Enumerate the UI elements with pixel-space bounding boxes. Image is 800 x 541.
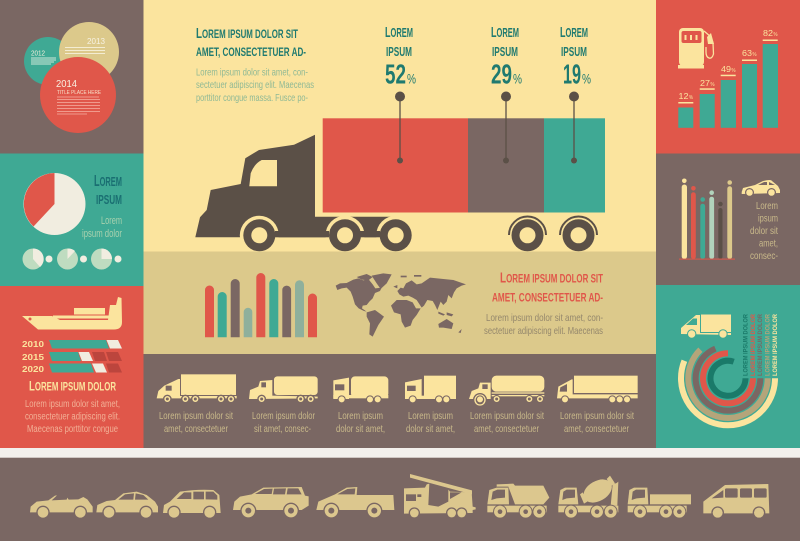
text: car caption: dolor sit — [750, 225, 778, 237]
captions: sit amet, consec- — [254, 423, 311, 435]
text: world body: Lorem ipsum dolor sit amet, con- — [486, 312, 603, 324]
text: main body: Lorem ipsum dolor sit amet, con- — [196, 66, 308, 78]
mini pies — [22, 248, 122, 270]
icon: van — [703, 484, 769, 519]
icon: cement mixer — [558, 475, 618, 519]
panel: car chart — [656, 154, 800, 285]
pins — [395, 92, 579, 164]
icon: box truck 1 — [157, 374, 237, 403]
stat: 52%: 52 — [385, 58, 406, 90]
bar chart: fuel: % — [774, 32, 778, 38]
panel: vehicle strip — [0, 458, 800, 541]
captions: amet, consectetuer — [164, 423, 228, 435]
stat: 52%: LOREM — [385, 24, 413, 41]
icon: ship — [22, 297, 122, 330]
captions: amet, consectetuer — [474, 423, 539, 435]
panel: truck types — [144, 354, 656, 448]
stat: 29% — [491, 24, 522, 90]
bar chart: fuel: % — [710, 82, 715, 88]
icon: minivan — [163, 490, 221, 519]
captions — [159, 410, 634, 435]
circle: 2014: 2014 — [56, 79, 77, 90]
panel: world — [144, 252, 656, 354]
bar chart: fuel: 27 — [700, 78, 710, 88]
text: world body — [484, 312, 603, 337]
text: car caption: Lorem — [756, 200, 778, 212]
icon: flatbed — [628, 488, 691, 519]
stat: 52% — [385, 24, 416, 90]
panel: fuel chart — [656, 0, 800, 154]
captions: amet, consectetuer — [564, 423, 629, 435]
icon: crane truck — [404, 474, 476, 519]
captions: Lorem ipsum dolor — [252, 410, 315, 422]
bar chart — [205, 273, 317, 337]
icon: tanker 2 — [333, 376, 388, 403]
text: pie caption — [82, 215, 122, 240]
bars: years: 2020 — [22, 364, 44, 374]
panel: pie charts — [0, 154, 144, 286]
vertical labels: LOREM IPSUM DOLOR — [758, 313, 764, 376]
icon: fuel pump — [678, 28, 714, 68]
panel: delivery arcs — [656, 285, 800, 448]
text: shipping body: Lorem ipsum dolor sit amet, — [25, 399, 120, 410]
stat: 29%: 29 — [491, 58, 512, 90]
panel: pie charts: IPSUM — [96, 192, 122, 207]
text: car caption: consec- — [750, 250, 778, 262]
icon: fuel tanker — [469, 376, 544, 407]
icon: wagon — [233, 487, 309, 519]
stat: 29%: % — [513, 70, 522, 86]
truck trailer segments — [323, 118, 605, 212]
vertical labels: LOREM IPSUM DOLOR — [773, 313, 779, 376]
vertical labels: LOREM IPSUM DOLOR — [751, 313, 757, 376]
cars row — [30, 487, 394, 519]
captions: Lorem ipsum dolor sit — [560, 410, 634, 422]
text: main body: sectetuer adipiscing elit. Maecenas — [196, 79, 314, 91]
heading: main: LOREM IPSUM DOLOR SIT — [196, 25, 298, 42]
stat: 19%: % — [582, 70, 591, 86]
text: pie caption: ipsum dolor — [82, 228, 122, 240]
stat: 19% — [560, 24, 591, 90]
bar chart: fuel: % — [689, 95, 693, 101]
bar chart: fuel — [678, 28, 778, 128]
rear wheels — [509, 217, 597, 251]
stat: 52%: % — [407, 70, 416, 86]
vertical labels: LOREM IPSUM DOLOR — [766, 313, 772, 376]
bars: years: 2015 — [22, 352, 44, 362]
world map — [336, 273, 466, 337]
stat: 19%: LOREM — [560, 24, 588, 41]
bars: years: 2010 — [22, 339, 44, 349]
circle: 2012: 2012 — [31, 50, 45, 58]
circle: 2013: 2013 — [87, 36, 105, 46]
icon: car — [742, 180, 780, 197]
text: pie caption: Lorem — [101, 215, 122, 227]
radial chart — [681, 349, 775, 425]
text: car caption — [750, 200, 778, 262]
captions: Lorem ipsum dolor sit — [159, 410, 233, 422]
text: main body — [196, 66, 314, 104]
bar chart: fuel: % — [752, 52, 757, 58]
bar chart: fuel: % — [732, 68, 736, 74]
captions: dolor sit amet, — [336, 423, 385, 435]
captions: Lorem ipsum — [338, 410, 383, 422]
text: main body: porttitor congue massa. Fusce po- — [196, 92, 308, 104]
heading: lorem ipsum: LOREM — [94, 173, 122, 190]
heading: world: AMET, CONSECTETUER AD- — [492, 290, 603, 304]
bar chart: fuel: 49 — [721, 64, 731, 74]
stat: 19%: IPSUM — [561, 44, 587, 59]
circle: 2012 — [24, 37, 72, 85]
icon: tanker 1 — [249, 376, 318, 403]
icon: dump truck — [487, 484, 549, 519]
stat: 19%: 19 — [563, 58, 581, 90]
stat: 29%: IPSUM — [492, 44, 518, 59]
heading: lorem ipsum dolor: LOREM IPSUM DOLOR — [29, 378, 116, 394]
icon: box truck 2 — [405, 376, 456, 403]
icon: van — [681, 314, 731, 338]
panel: timeline circles — [0, 0, 144, 154]
stat: 29%: LOREM — [491, 24, 519, 41]
panel: shipping — [0, 286, 144, 448]
text: shipping body: Maecenas porttitor congue — [27, 424, 118, 435]
circle: 2013 — [59, 22, 119, 82]
bar chart: fuel: 63 — [742, 48, 752, 58]
heading: main — [196, 25, 306, 59]
captions: Lorem ipsum — [408, 410, 453, 422]
truck icons — [157, 374, 638, 407]
lollipop bars — [679, 178, 735, 260]
vertical labels: LOREM IPSUM DOLOR — [743, 313, 749, 376]
pie chart — [24, 173, 86, 235]
text: shipping body: consectetuer adipiscing elit. — [25, 412, 120, 422]
text: world body: sectetuer adipiscing elit. Maecenas — [484, 325, 603, 337]
icon: coupe — [96, 492, 158, 519]
vertical labels — [743, 313, 779, 376]
stat: 52%: IPSUM — [386, 44, 412, 59]
heading: main: AMET, CONSECTETUER AD- — [196, 45, 306, 59]
captions: dolor sit amet, — [406, 423, 455, 435]
text: car caption: amet, — [759, 238, 778, 250]
circle: 2014 — [40, 57, 116, 133]
icon: convertible — [30, 495, 93, 519]
icon: long truck — [557, 376, 638, 403]
heading: world — [492, 270, 603, 304]
panel: truck — [144, 0, 656, 255]
text: car caption: ipsum — [758, 212, 778, 224]
bar chart: fuel: 12 — [678, 91, 689, 101]
circle: 2014: TITLE PLACE HERE — [57, 90, 101, 96]
icon: pickup — [316, 487, 394, 519]
heading: world: LOREM IPSUM DOLOR SIT — [500, 270, 603, 286]
bars: years — [22, 339, 122, 374]
icon: truck cab — [190, 135, 420, 255]
captions: Lorem ipsum dolor sit — [470, 410, 544, 422]
text: shipping body — [25, 399, 120, 435]
trucks row — [404, 474, 769, 519]
bar chart: fuel: 82 — [763, 28, 773, 38]
